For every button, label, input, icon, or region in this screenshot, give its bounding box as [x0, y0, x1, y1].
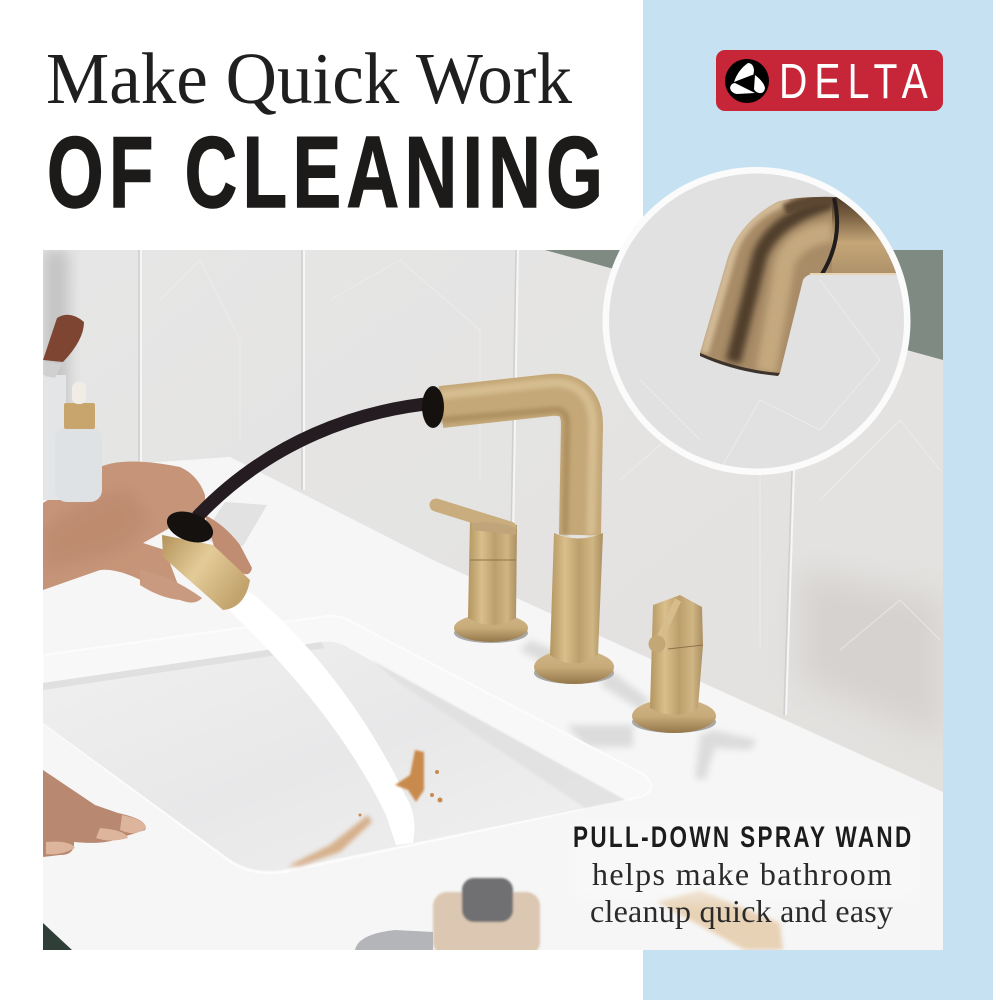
main faucet spout: [441, 383, 614, 684]
wall tile seams: [139, 250, 940, 715]
logo wordmark: DELTA: [779, 55, 928, 109]
heading line 2: OF CLEANING: [47, 115, 603, 229]
title: [46, 38, 603, 229]
text glow: [662, 889, 729, 904]
panel: light blue background: [643, 0, 993, 1000]
spray wand: [162, 506, 250, 610]
right faucet handle: [632, 595, 716, 733]
chrome item: [355, 930, 433, 950]
spout body: [700, 196, 896, 373]
makeup brush: [43, 315, 84, 378]
callout text line 1: helps make bathroom: [592, 856, 892, 892]
spout cap: [422, 386, 444, 428]
hose: [197, 403, 435, 517]
towel: [657, 890, 783, 950]
small dish: [207, 502, 267, 546]
left faucet handle: [436, 505, 528, 643]
logo: Delta: [716, 50, 943, 111]
lower hand fingers: [43, 770, 146, 857]
dark wall strip: [545, 250, 943, 360]
inset circle: spout close-up: [602, 167, 910, 475]
callout text line 2: cleanup quick and easy: [590, 893, 893, 929]
sink: [43, 642, 624, 870]
callout heading: PULL-DOWN SPRAY WAND: [573, 820, 911, 854]
cosmetic bottle: [43, 375, 102, 502]
jar: [433, 878, 540, 956]
thumb over wand: [140, 580, 202, 603]
water stream: [226, 592, 414, 845]
counter: [43, 457, 943, 950]
photo: [43, 250, 943, 956]
icon: Delta triangle: [725, 59, 769, 103]
makeup stain: [288, 750, 442, 866]
counter corner: [43, 923, 72, 950]
hand holding wand: [43, 462, 252, 602]
faucet shadows: [520, 640, 757, 780]
heading line 1: Make Quick Work: [46, 38, 572, 119]
wall shadow: [800, 576, 943, 727]
illustration: bathroom sink scene: [43, 167, 943, 950]
